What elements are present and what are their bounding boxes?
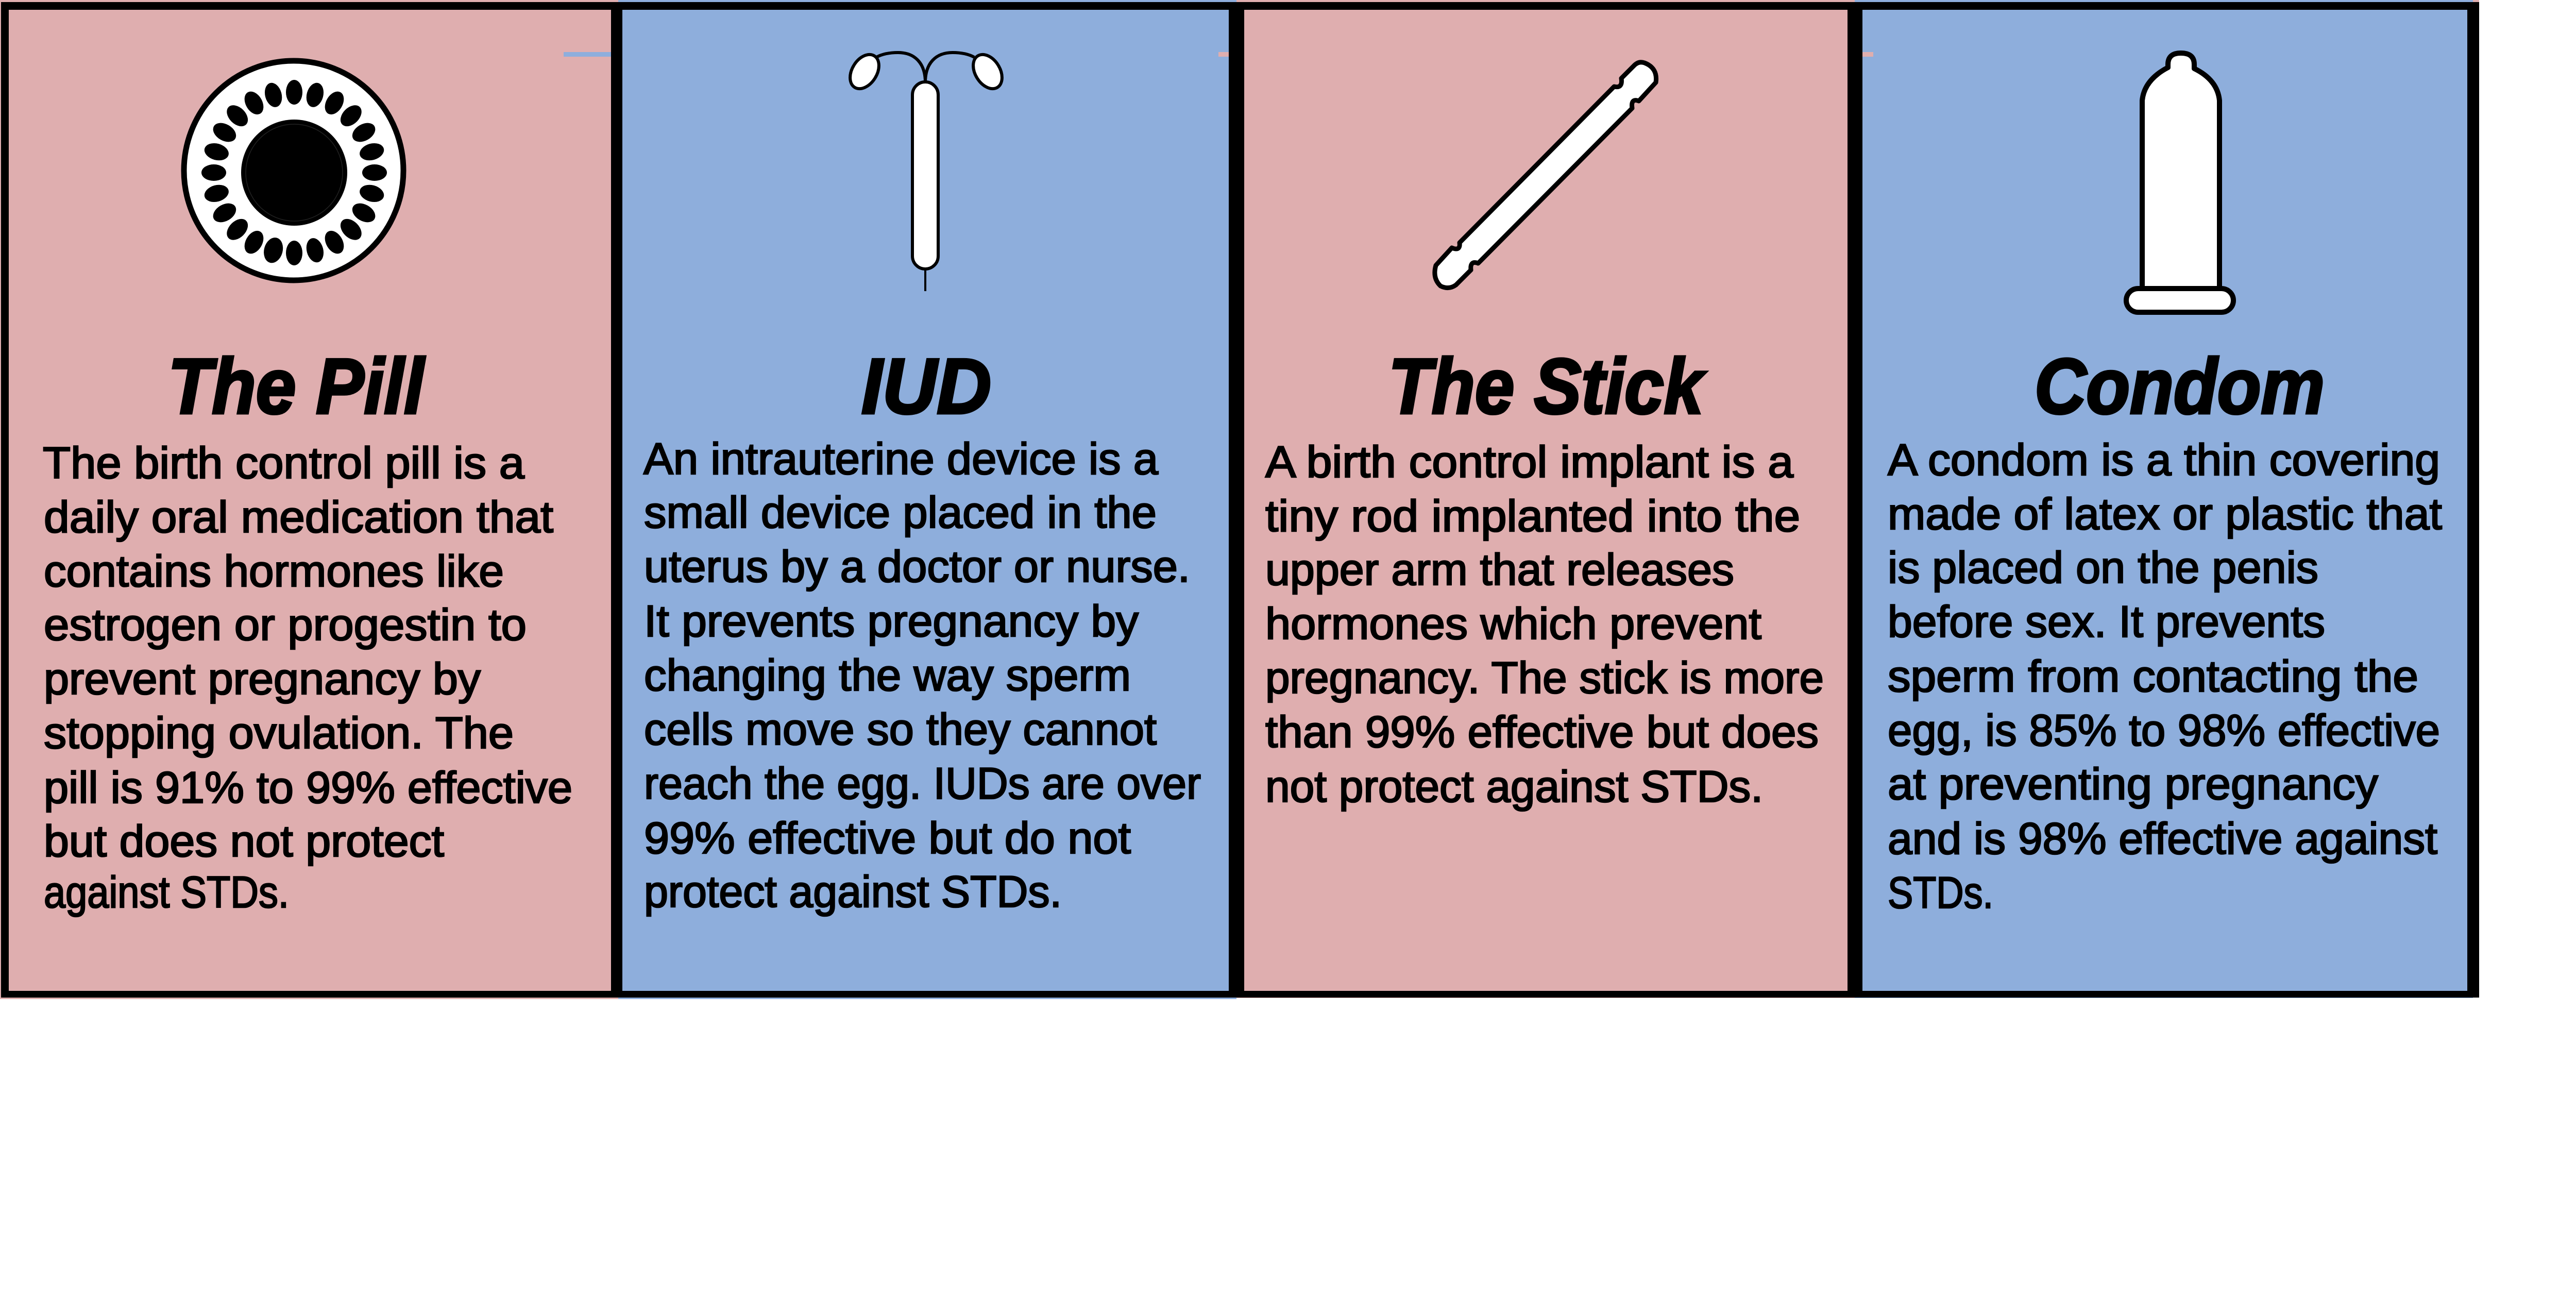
text: IUD description: small device placed in the	[644, 488, 1157, 537]
icon: condom	[2126, 53, 2233, 312]
text: condom description: is placed on the penis	[1888, 543, 2318, 593]
panel: the stick	[1236, 0, 1855, 998]
frame: black borders and dividers	[1, 2, 2479, 998]
text: IUD description: reach the egg. IUDs are over	[644, 759, 1201, 808]
text: IUD description: It prevents pregnancy by	[644, 597, 1139, 646]
text: pill description: stopping ovulation. The	[44, 708, 514, 758]
text: IUD description	[643, 434, 1201, 917]
text: pill description: estrogen or progestin to	[44, 600, 527, 650]
text: condom description: A condom is a thin covering	[1888, 435, 2440, 485]
text: IUD description: An intrauterine device is a	[643, 434, 1158, 484]
text: stick description: A birth control implant is a	[1265, 437, 1793, 487]
text: condom description: and is 98% effective against	[1888, 814, 2437, 864]
panel: the pill	[0, 0, 618, 999]
heading: the pill: The Pill	[168, 343, 426, 430]
text: condom description	[1888, 435, 2442, 918]
text: pill description: prevent pregnancy by	[44, 654, 481, 704]
icon: IUD	[844, 49, 1008, 291]
text: stick description	[1265, 437, 1824, 812]
text: pill description: against STDs.	[44, 868, 289, 917]
text: IUD description: 99% effective but do not	[644, 814, 1131, 863]
text: IUD description: cells move so they cannot	[644, 705, 1157, 754]
text: stick description: pregnancy. The stick is more	[1265, 653, 1824, 703]
text: stick description: not protect against STDs.	[1265, 762, 1763, 812]
text: condom description: before sex. It prevents	[1888, 597, 2325, 647]
text: IUD description: protect against STDs.	[644, 867, 1062, 917]
icon: pill pack	[184, 61, 403, 280]
panel: condom	[1855, 0, 2479, 998]
text: condom description: made of latex or plastic that	[1888, 490, 2442, 539]
text: condom description: at preventing pregnancy	[1888, 760, 2378, 809]
heading: the stick: The Stick	[1388, 343, 1706, 430]
text: IUD description: changing the way sperm	[644, 651, 1131, 700]
heading: IUD: IUD	[861, 343, 991, 430]
icon: implant rod	[1435, 62, 1656, 288]
text: stick description: upper arm that releases	[1265, 545, 1734, 595]
text: stick description: tiny rod implanted into the	[1265, 492, 1800, 541]
text: stick description: hormones which prevent	[1265, 599, 1761, 649]
heading: condom: Condom	[2035, 343, 2325, 430]
text: condom description: STDs.	[1888, 868, 1993, 918]
text: condom description: egg, is 85% to 98% effective	[1888, 706, 2440, 755]
text: stick description: than 99% effective but does	[1265, 707, 1819, 757]
text: pill description: pill is 91% to 99% effective	[44, 763, 572, 813]
text: pill description	[43, 438, 572, 917]
text: pill description: The birth control pill is a	[43, 438, 524, 488]
text: pill description: contains hormones like	[44, 547, 504, 596]
text: pill description: daily oral medication that	[44, 493, 553, 542]
text: condom description: sperm from contacting the	[1888, 652, 2418, 701]
text: IUD description: uterus by a doctor or nurse.	[644, 542, 1190, 592]
panel: IUD	[618, 0, 1236, 999]
text: pill description: but does not protect	[44, 817, 444, 866]
